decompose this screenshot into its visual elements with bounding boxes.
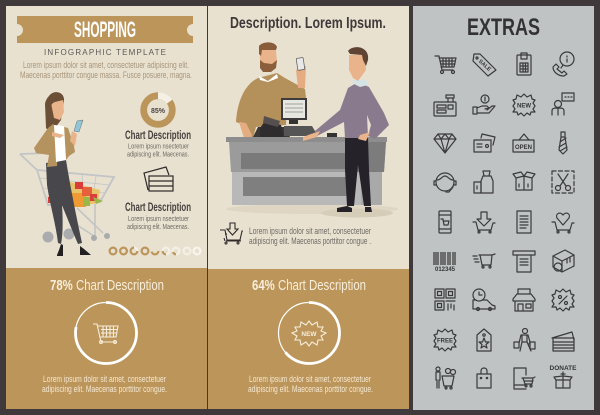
icon: new badge [513,94,535,116]
chart: 64% ring [278,302,340,364]
body text: Lorem ipsum dolor sit amet, consectetuer [249,374,371,384]
panel: extras [413,6,594,410]
icon: delivery truck [473,289,495,310]
icon: cash register [434,95,456,116]
heading: 64%: 64% Chart Description [252,277,366,294]
icon: mobile cart [514,368,535,389]
icon: parcel check [553,250,574,272]
icon: free badge: FREE [437,338,453,344]
chart description 1: Chart Description [125,128,191,142]
icon: shopping bag [477,368,491,388]
chart description 2: Lorem ipsum nsectetuer [128,214,189,223]
icon: shopper [514,328,535,351]
chart description 1: Lorem ipsum nsectetuer [128,142,189,150]
icon: star tag [477,329,491,351]
cashier body [236,73,306,138]
icon: tie [559,132,567,154]
icon: kitchen appliance [474,171,493,193]
icon: free badge [434,329,456,351]
hair back [45,92,64,134]
panel: shopping [6,6,207,409]
icon: qr code [435,289,455,310]
icon: receipt [517,211,531,233]
chart description 2: adipiscing elit. Maecenas. [127,222,189,231]
icon: barcode [434,252,456,273]
heading: EXTRAS [467,14,540,41]
jacket [34,124,62,167]
icon: cart [435,56,456,74]
illustration: woman with cart [20,92,114,256]
body text [42,374,167,394]
cashier head [260,50,277,72]
icon: download cart [473,212,495,233]
trousers [46,160,82,244]
phone [74,120,83,132]
shoes [57,244,63,256]
panel: description [208,6,409,409]
icon: new badge: NEW [517,104,531,110]
chart description 1 [125,128,191,158]
chart description 1: adipiscing elit. Maecenas. [127,150,189,158]
icon: open sign: OPEN [515,145,532,151]
icon: donate box [550,365,577,388]
icon caption: Lorem ipsum dolor sit amet, consectetuer [249,226,371,236]
icon: hand coin [473,95,495,114]
icon: receipt printer [513,251,535,272]
icon: barcode: 012345 [435,267,456,273]
icon: cart [93,324,118,344]
chart: 85% donut [144,96,172,124]
icon caption: adipiscing elit. Maecenas porttitor congue . [249,236,371,246]
icon: diamond [434,134,456,153]
intro text [20,60,192,80]
chart description 2: Chart Description [125,200,191,214]
icon: family shopping [436,367,456,389]
cart [20,153,114,238]
floor shadow [226,204,398,214]
icon: card terminal [517,53,531,75]
title banner [17,16,193,43]
title banner: SHOPPING [74,17,136,42]
icon: speech person [552,93,574,115]
icon: phone info [553,52,574,76]
illustration: cashier and customer [226,42,398,217]
icon: cart with down arrow [220,223,243,244]
icon: mobile shopping [439,211,451,233]
icon: store [513,289,535,311]
icon: heart cart [552,213,574,233]
shirt [54,125,66,162]
body text: adipiscing elit. Maecenas porttitor congue. [42,384,167,394]
icon: coupon scissors [552,171,574,193]
icon: new badge: NEW [301,331,317,338]
body text: adipiscing elit. Maecenas porttitor congue. [248,384,373,394]
icon: credit cards [144,167,173,191]
intro text: Maecenas porttitor congue massa. Fusce posuere, magna. [20,70,192,80]
icon caption [249,226,371,246]
intro text: Lorem ipsum dolor sit amet, consectetuer adipiscing elit. [23,60,189,70]
counter [226,137,387,142]
icon: open sign [513,134,534,152]
icon: percent badge [552,289,574,311]
icon: donate box: DONATE [550,365,577,372]
chart: 78% ring [76,302,136,364]
icon: box [513,172,535,190]
icon: cards [474,134,495,152]
chart: 85% donut: 85% [151,108,166,115]
body text [248,374,373,394]
icon: cards stack [552,332,574,351]
face [51,100,64,120]
icon: new badge [292,321,326,346]
body text: Lorem ipsum dolor sit amet, consectetuer [43,374,166,384]
icon: headset [434,173,456,192]
icon: sale tag: SALE [477,59,492,73]
icon: fast cart [473,254,495,268]
register [281,98,307,120]
customer torso [315,82,389,139]
customer legs [345,137,371,206]
chart description 2 [125,200,191,231]
subtitle: INFOGRAPHIC TEMPLATE [44,48,166,57]
heading: Description. Lorem Ipsum. [230,15,386,32]
icon: sale tag [473,54,496,76]
heading: 78%: 78% Chart Description [50,277,164,294]
customer head [349,55,366,81]
progress dots [110,248,200,254]
groceries [48,182,100,207]
phone [296,58,305,70]
